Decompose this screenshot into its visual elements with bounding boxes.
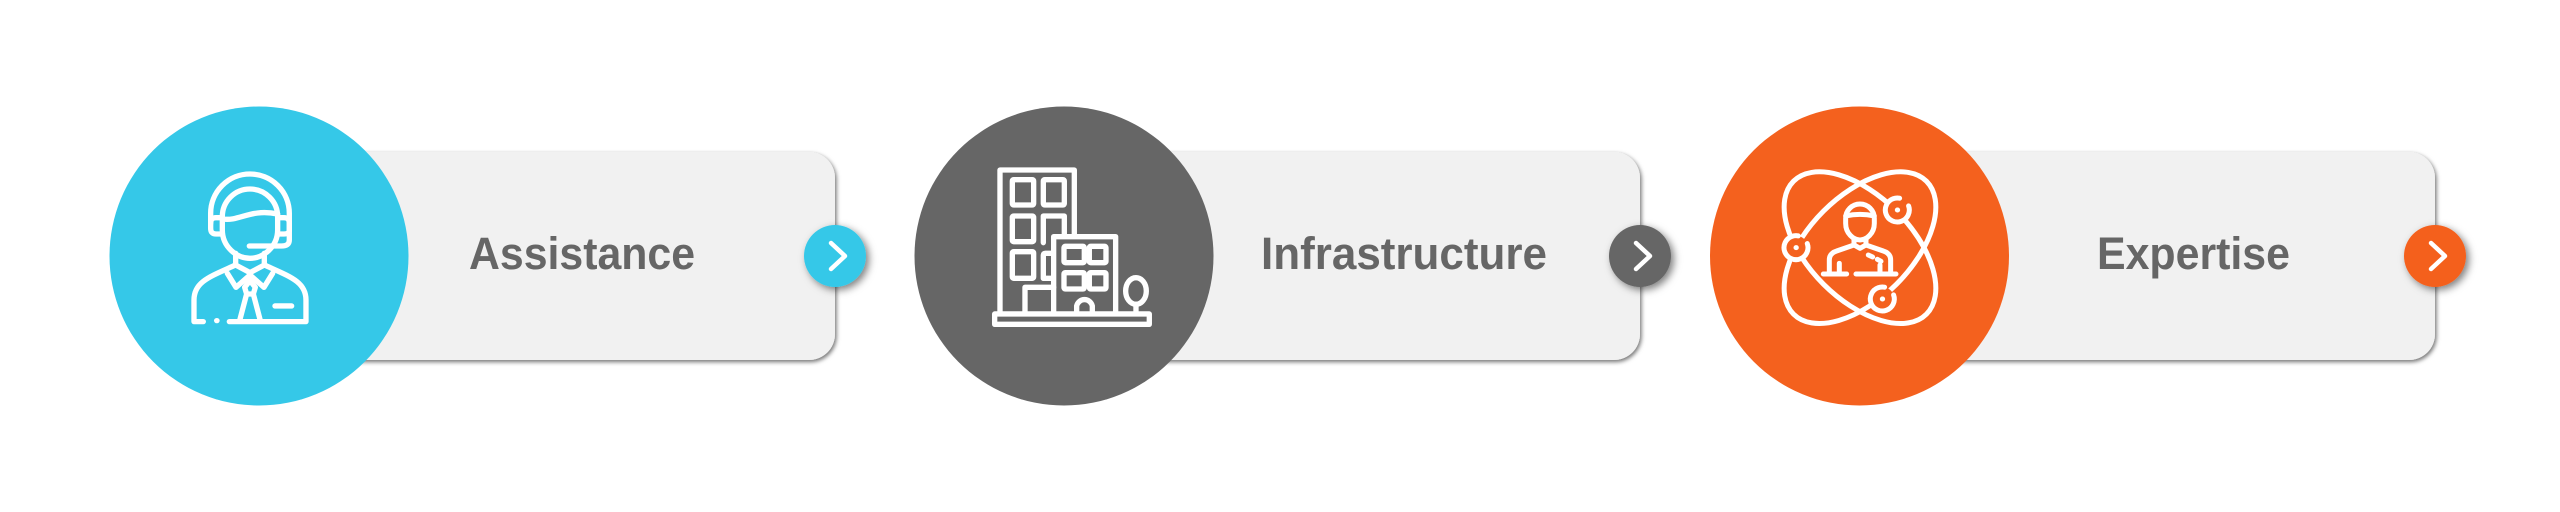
text: Infrastructure: Infrastructure [1261, 228, 1547, 279]
panel: Expertise [1710, 106, 2466, 406]
icon: office buildings and tree [995, 170, 1149, 324]
icon: support agent with headset [194, 174, 306, 322]
panel: Infrastructure [914, 106, 1671, 406]
card: Infrastructure [1105, 152, 1640, 360]
circle: Expertise [1710, 106, 2009, 406]
arrow button: Expertise [2404, 225, 2466, 287]
circle: Infrastructure [914, 106, 1214, 406]
icon: scientist inside atom orbits [1757, 145, 1963, 351]
panel: Assistance [110, 106, 866, 406]
text: Assistance: Assistance [469, 228, 695, 279]
text: Expertise: Expertise [2097, 228, 2290, 279]
card: Expertise [1900, 152, 2435, 360]
card: Assistance [300, 152, 835, 360]
arrow button: Assistance [804, 225, 866, 287]
arrow button: Infrastructure [1609, 225, 1671, 287]
circle: Assistance [110, 106, 408, 406]
